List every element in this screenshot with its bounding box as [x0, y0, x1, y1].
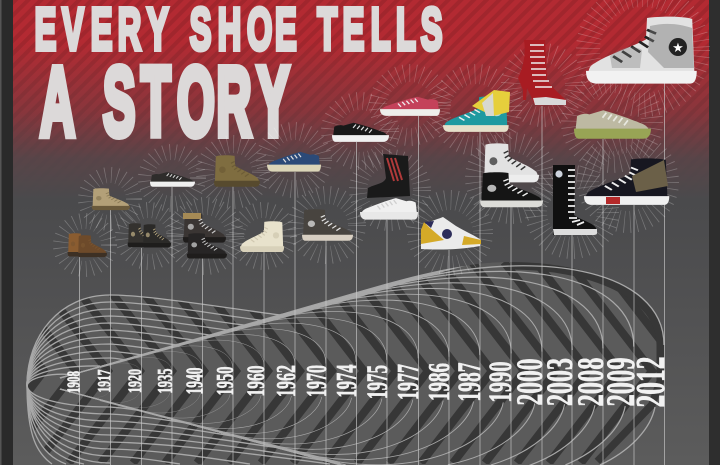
- year labels: 2003: [540, 358, 581, 406]
- year labels: 1962: [271, 365, 301, 397]
- lower arcs: [60, 389, 655, 465]
- year labels: 2000: [510, 358, 551, 406]
- year labels: 2009: [598, 358, 643, 406]
- lower left line bundle: [27, 385, 330, 464]
- shoe 1917: [92, 188, 130, 210]
- shoe 1940 pair: [183, 213, 227, 259]
- shoe 2009: [584, 158, 669, 205]
- year labels: 1987: [452, 362, 488, 402]
- shoe 1990 pair: [480, 143, 543, 207]
- year labels: 1940: [182, 368, 208, 394]
- shoe 1950: [214, 155, 260, 187]
- title: a story: ASTORY: [40, 49, 289, 157]
- chevron stripes: [28, 262, 664, 464]
- sunbursts behind shoes: [61, 0, 698, 269]
- thick lower band: [100, 399, 340, 464]
- year labels: 1960: [243, 366, 270, 396]
- shoe 2008: [574, 110, 651, 139]
- shoes: [68, 17, 697, 259]
- left dark border: [0, 0, 13, 465]
- year labels: 1917: [94, 370, 114, 392]
- black high top: [480, 172, 543, 207]
- shoe 1987: [443, 90, 510, 132]
- year labels: 1975: [361, 365, 394, 399]
- right dark border: [709, 0, 720, 465]
- year labels: 2012: [627, 356, 673, 408]
- upper arcs: [60, 266, 664, 378]
- year labels: 1950: [213, 366, 239, 396]
- shoe 2003 knee high: [553, 165, 597, 235]
- year labels: 1935: [153, 368, 177, 394]
- timeline loops: [26, 262, 664, 465]
- white shoe: [360, 198, 418, 220]
- thick upper band: [100, 266, 465, 368]
- shoe 1935: [150, 172, 195, 187]
- vertical timeline lines: [80, 83, 664, 465]
- year labels: [64, 356, 673, 408]
- year labels: 1977: [390, 364, 425, 400]
- shoe 1962: [267, 152, 321, 172]
- black boot with stripes: [367, 154, 410, 198]
- top left line bundle: [27, 295, 280, 385]
- shoe 1986: [421, 217, 481, 250]
- shoe 1960: [240, 221, 284, 252]
- year labels: 1908: [64, 371, 84, 393]
- year labels: 1970: [302, 365, 333, 397]
- year labels: 1990: [483, 362, 519, 402]
- shoe 1975 pair: [360, 154, 418, 220]
- year labels: 2008: [571, 358, 612, 406]
- white and black high top: [483, 143, 539, 182]
- year labels: 1974: [332, 364, 363, 398]
- year labels: 1920: [125, 369, 146, 393]
- shoe 2012: ★: [672, 40, 684, 55]
- shoe 1977: [380, 97, 440, 116]
- shoe 1974: [332, 123, 389, 142]
- shoe 1908: [68, 233, 107, 257]
- shoe 2012: [586, 17, 697, 84]
- shoe 2000 red heeled boot: [518, 40, 566, 105]
- year labels: 1986: [421, 363, 456, 401]
- shoe 1970: [302, 209, 353, 241]
- shoe 1920: [128, 223, 171, 247]
